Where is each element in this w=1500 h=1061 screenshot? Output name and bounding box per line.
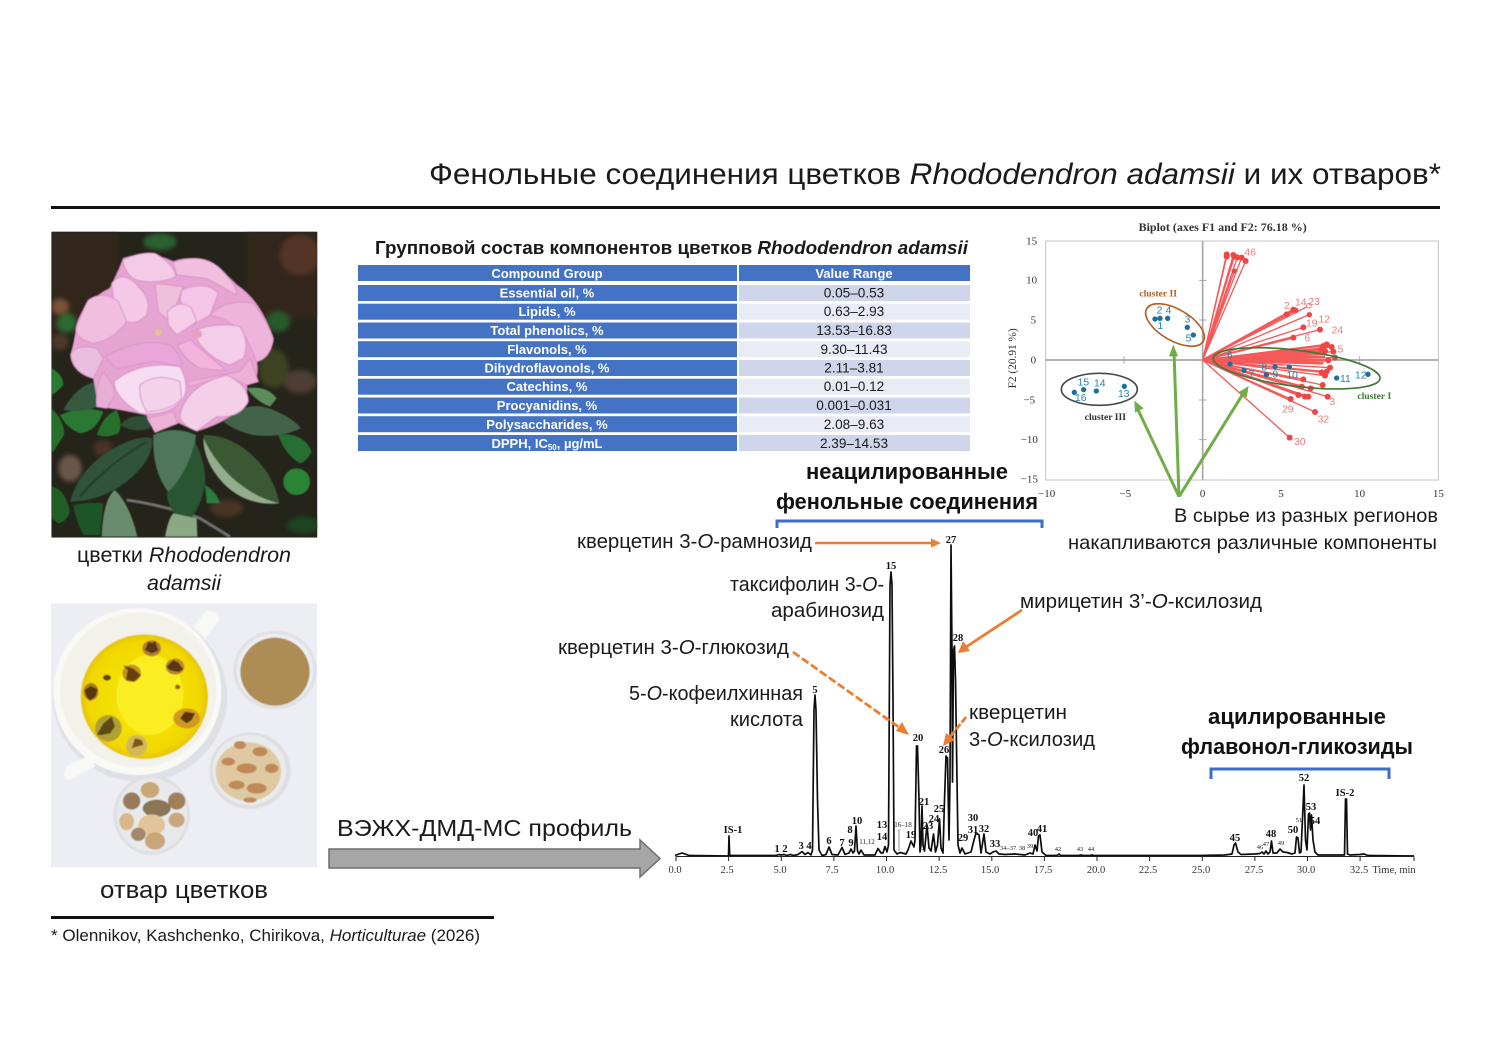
peak labels: 39	[1027, 843, 1033, 850]
table row: procyanidins	[358, 398, 970, 414]
table row: essential oil: Essential oil, %	[500, 286, 595, 300]
cluster I ellipse and label: cluster I	[1357, 391, 1391, 402]
arrow: dashed to peak 26	[943, 717, 966, 746]
table row: essential oil	[358, 285, 970, 301]
table row: procyanidins: 0.001–0.031	[816, 398, 892, 413]
peak labels: 26	[939, 745, 949, 756]
sample labels: 13	[1118, 389, 1130, 400]
loading point labels: 5	[1338, 345, 1344, 356]
sample points	[1072, 316, 1371, 395]
heading: acylated flavonol glycosides	[1181, 704, 1413, 759]
biplot axis labels: −15	[1021, 474, 1038, 486]
table row: total phenolics	[358, 322, 970, 338]
loading point labels: 32	[1318, 414, 1329, 425]
time axis labels: 12.5	[929, 865, 947, 876]
peak labels: 51	[1296, 817, 1302, 824]
peak labels: 16–18	[894, 821, 912, 829]
cluster III ellipse and label: cluster III	[1085, 412, 1126, 423]
caption: flowers: цветки Rhododendron	[77, 544, 291, 567]
peak labels: 53	[1306, 802, 1316, 813]
sample labels: 7	[1249, 369, 1255, 380]
time axis labels	[668, 865, 1416, 876]
peak labels: 25	[934, 804, 944, 815]
time axis	[676, 856, 1414, 861]
compound label: 5-O-caffeoylquinic acid	[629, 683, 804, 731]
time axis labels: 7.5	[825, 865, 839, 876]
loading point labels: 2	[1284, 301, 1290, 312]
peak labels: 28	[953, 633, 963, 644]
time axis labels: 30.0	[1297, 865, 1315, 876]
heading: non-acylated phenolics: фенольные соединения	[776, 489, 1038, 514]
peak labels: 43	[1077, 846, 1083, 853]
caption: flowers	[77, 544, 291, 595]
sample labels: 6	[1227, 350, 1233, 361]
footnote citation: * Olennikov, Kashchenko, Chirikova, Horticulturae (2026)	[51, 926, 480, 945]
table row: DPPH: 2.39–14.53	[820, 436, 888, 451]
table heading: Групповой состав компонентов цветков Rhododendron adamsii	[375, 238, 969, 258]
chromatogram	[668, 535, 1416, 876]
caption: flowers: adamsii	[147, 572, 222, 595]
peak labels: 1 2	[774, 844, 788, 855]
regional note: В сырье из разных регионов	[1174, 505, 1438, 527]
time axis labels: 20.0	[1087, 865, 1105, 876]
biplot frame and axes	[1046, 241, 1438, 480]
peak labels: 10	[852, 816, 862, 827]
table row: catechins: 0.01–0.12	[824, 379, 884, 394]
caption: decoction: отвар цветков	[100, 877, 268, 904]
peak labels: 42	[1055, 846, 1061, 853]
table header	[358, 265, 970, 281]
sample labels: 2	[1157, 306, 1163, 317]
table header: Compound Group	[491, 266, 603, 281]
time axis labels: 25.0	[1192, 865, 1210, 876]
biplot axis labels: 10	[1026, 275, 1038, 287]
heading: acylated flavonol glycosides: ацилированные	[1208, 704, 1386, 729]
biplot axis labels: 0	[1200, 488, 1206, 500]
loading point labels	[1244, 248, 1344, 448]
compound label: myricetin 3'-O-xyloside: мирицетин 3’-O-ксилозид	[1020, 591, 1262, 613]
peak labels: 45	[1230, 833, 1240, 844]
sample labels	[1075, 306, 1367, 404]
cluster II ellipse and label	[1139, 288, 1211, 355]
compound label: taxifolin 3-O-arabinoside	[730, 574, 884, 622]
table row: flavonols: Flavonols, %	[507, 342, 587, 357]
biplot axis labels: F2 (20.91 %)	[1007, 328, 1019, 388]
table row: catechins: Catechins, %	[507, 379, 588, 394]
peak labels: 48	[1266, 829, 1276, 840]
peak labels: 50	[1288, 825, 1298, 836]
biplot axis labels: 0	[1031, 354, 1037, 366]
loading point labels: 3	[1329, 397, 1335, 408]
peak labels: 22	[919, 845, 925, 852]
peak labels: 20	[913, 733, 923, 744]
table row: total phenolics: 13.53–16.83	[816, 323, 892, 338]
peak labels	[724, 535, 1354, 855]
peak labels: 33	[990, 839, 1000, 850]
compound label: taxifolin 3-O-arabinoside: таксифолин 3-O-	[730, 574, 884, 596]
peak labels: 27	[946, 535, 956, 546]
compound label: quercetin 3-O-xyloside: кверцетин	[969, 702, 1067, 724]
peak labels: 41	[1037, 824, 1047, 835]
time axis labels: 2.5	[720, 865, 734, 876]
table row: DPPH	[358, 435, 970, 452]
compound label: quercetin 3-O-glucoside: кверцетин 3-O-глюкозид	[558, 637, 789, 659]
title rule	[51, 206, 1440, 209]
title: Фенольные соединения цветков Rhododendron adamsii и их отваров*	[429, 158, 1442, 191]
sample labels: 1	[1157, 321, 1163, 332]
cluster II ellipse and label: cluster II	[1139, 288, 1177, 299]
table row: DPPH: , µg/mL	[557, 436, 603, 451]
loading point labels: 24	[1332, 325, 1343, 336]
time axis labels: 27.5	[1245, 865, 1263, 876]
peak labels: 13	[877, 820, 887, 831]
table row: flavonols	[358, 341, 970, 357]
peak labels: 14	[877, 832, 888, 843]
compound label: 5-O-caffeoylquinic acid: кислота	[730, 709, 804, 731]
cluster I ellipse and label	[1211, 340, 1391, 402]
chromatogram trace	[675, 545, 1414, 856]
heading: non-acylated phenolics	[776, 459, 1038, 514]
sample labels: 15	[1078, 378, 1089, 389]
time axis labels: 22.5	[1139, 865, 1157, 876]
loading points	[1224, 251, 1338, 441]
table row: dihydroflavonols: 2.11–3.81	[824, 360, 884, 376]
arrow: gray block arrow to chromatogram	[329, 840, 660, 877]
loading point labels: 46	[1244, 248, 1256, 259]
loading point labels: 12	[1318, 315, 1330, 326]
peak labels: 7	[839, 838, 845, 849]
bracket: non-acylated	[777, 521, 1042, 528]
table header: Value Range	[815, 266, 893, 281]
table row: essential oil: 0.05–0.53	[824, 286, 884, 300]
sample labels: 10	[1286, 370, 1298, 381]
time axis labels: 10.0	[876, 865, 894, 876]
table row: lipids: Lipids, %	[518, 304, 576, 319]
green arrows to clusters	[1134, 344, 1249, 497]
loading point labels: 19	[1306, 319, 1318, 330]
biplot axis labels: −10	[1021, 434, 1038, 446]
peak labels: 23	[923, 821, 933, 832]
loading point labels: 30	[1294, 437, 1306, 448]
biplot axis labels	[1007, 235, 1444, 500]
peak labels: 34–37	[1000, 845, 1017, 852]
peak labels: IS-2	[1336, 788, 1354, 799]
time axis labels: 5.0	[773, 865, 787, 876]
peak labels: 19	[906, 830, 916, 841]
loading point labels: 14	[1295, 298, 1307, 309]
peak labels: 44	[1088, 846, 1095, 853]
sample labels: 12	[1355, 370, 1367, 381]
sample labels: 3	[1185, 314, 1191, 325]
table row: polysaccharides: 2.08–9.63	[824, 417, 884, 432]
time axis labels: 32.5	[1350, 865, 1368, 876]
biplot title: Biplot (axes F1 and F2: 76.18 %)	[1139, 220, 1307, 234]
peak labels: 11,12	[859, 838, 875, 846]
peak labels: 49	[1278, 840, 1284, 847]
decorative cup shadow	[53, 636, 227, 781]
sample labels: 5	[1186, 334, 1192, 345]
peak labels: 46	[1257, 844, 1264, 851]
regional note: накапливаются различные компоненты	[1068, 532, 1437, 554]
table row: polysaccharides	[358, 416, 970, 432]
peak labels: 21	[919, 797, 929, 808]
table row: DPPH: DPPH, IC	[491, 436, 548, 451]
table row: lipids	[358, 304, 970, 320]
sample labels: 11	[1340, 374, 1351, 385]
table row: procyanidins: Procyanidins, %	[497, 398, 598, 413]
sample labels: 16	[1075, 393, 1087, 404]
photo: flower decoction	[51, 603, 317, 868]
peak labels: 29	[958, 833, 968, 844]
peak labels: IS-1	[724, 825, 742, 836]
compound label: 5-O-caffeoylquinic acid: 5-O-кофеилхинная	[629, 683, 803, 705]
table row: lipids: 0.63–2.93	[824, 304, 884, 319]
sample labels: 9	[1272, 370, 1278, 381]
biplot axis labels: −10	[1038, 488, 1056, 500]
peak labels: 3 4	[798, 841, 812, 852]
peak labels: 5	[812, 685, 818, 696]
loading point labels: 6	[1304, 333, 1310, 344]
biplot axis labels: 10	[1354, 488, 1366, 500]
arrow: dashed to peak 20	[793, 652, 909, 735]
time axis labels: 15.0	[981, 865, 999, 876]
decorative stem	[127, 500, 230, 537]
photo: Rhododendron adamsii flowers	[51, 232, 320, 538]
heading: non-acylated phenolics: неацилированные	[806, 459, 1008, 484]
peak labels: 47	[1263, 841, 1270, 848]
biplot axis labels: 5	[1278, 488, 1284, 500]
peak labels: 54	[1310, 816, 1321, 827]
peak labels: 8	[847, 825, 853, 836]
loading point labels: 29	[1282, 404, 1294, 415]
time axis labels: 0.0	[668, 865, 682, 876]
peak labels: 24	[929, 814, 940, 825]
table row: total phenolics: Total phenolics, %	[490, 323, 604, 338]
table row: polysaccharides: Polysaccharides, %	[486, 417, 608, 432]
peak labels: 6	[826, 836, 832, 847]
biplot axis labels: 15	[1026, 235, 1038, 247]
sample labels: 4	[1166, 306, 1172, 317]
table row: flavonols: 9.30–11.43	[820, 342, 888, 357]
biplot axis labels: 5	[1031, 314, 1037, 326]
peak labels: 32	[979, 824, 989, 835]
arrow: to peak 28	[958, 610, 1022, 653]
table row: catechins	[358, 379, 970, 395]
sample labels: 8	[1261, 363, 1267, 374]
peak labels: 31	[968, 825, 978, 836]
compound label: taxifolin 3-O-arabinoside: арабинозид	[771, 600, 884, 622]
biplot axis labels: −5	[1119, 488, 1132, 500]
table row: DPPH: 50	[548, 443, 557, 452]
table row: dihydroflavonols: Dihydroflavonols, %	[485, 360, 610, 376]
loading vectors	[1203, 254, 1335, 438]
peak labels: 40	[1028, 828, 1038, 839]
peak labels: 52	[1299, 773, 1309, 784]
heading: acylated flavonol glycosides: флавонол-гликозиды	[1181, 734, 1413, 759]
peak labels: 15	[886, 561, 896, 572]
compound label: quercetin 3-O-xyloside: 3-O-ксилозид	[969, 729, 1095, 751]
peak labels: 38	[1019, 845, 1025, 852]
biplot axis labels: 15	[1433, 488, 1444, 500]
biplot axis labels: −5	[1023, 394, 1036, 406]
time axis labels: 17.5	[1034, 865, 1052, 876]
bracket: acylated	[1211, 769, 1389, 779]
table row: dihydroflavonols	[358, 360, 970, 376]
table: compound groups and value ranges	[358, 265, 970, 452]
compound label: quercetin 3-O-xyloside	[969, 702, 1095, 751]
sample labels: 14	[1094, 378, 1106, 389]
compound label: quercetin 3-O-rhamnoside: кверцетин 3-O-рамнозид	[577, 531, 812, 553]
footnote rule	[51, 916, 494, 919]
cluster III ellipse and label	[1061, 373, 1137, 423]
method label: ВЭЖХ-ДМД-МС профиль	[337, 815, 632, 841]
biplot chart	[1007, 220, 1444, 500]
peak labels: 30	[968, 813, 978, 824]
time axis labels: Time, min	[1372, 865, 1416, 876]
loading point labels: 23	[1308, 297, 1320, 308]
arrow: to peak 27	[815, 538, 941, 548]
regional note	[1068, 505, 1438, 554]
peak labels: 9	[848, 838, 854, 849]
